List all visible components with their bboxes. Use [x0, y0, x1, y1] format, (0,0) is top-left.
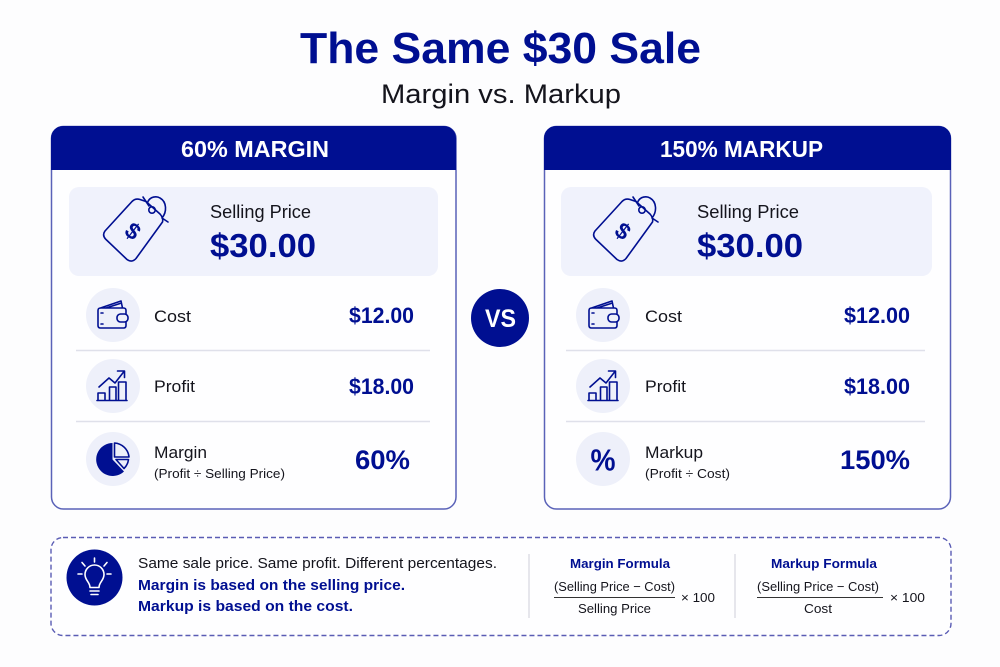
- icon: price tag: [594, 197, 658, 261]
- margin formula note: (Profit ÷ Selling Price): [154, 466, 285, 481]
- margin value: 60%: [355, 445, 410, 475]
- markup formula: × 100: [890, 590, 925, 605]
- row: profit: [86, 359, 414, 413]
- takeaway text: Same sale price. Same profit. Different percentages.: [138, 556, 497, 572]
- margin formula: Selling Price: [578, 601, 651, 616]
- row: profit: [576, 359, 910, 413]
- margin formula: (Selling Price − Cost): [554, 579, 675, 594]
- takeaway text: Markup is based on the cost.: [138, 599, 353, 615]
- icon: price tag: $: [120, 217, 146, 245]
- markup formula: (Selling Price − Cost): [757, 579, 879, 594]
- margin formula: [554, 556, 715, 616]
- card header: [544, 126, 951, 170]
- margin formula: Margin Formula: [570, 556, 671, 571]
- profit label: Profit: [154, 377, 195, 396]
- selling price label: Selling Price: [697, 202, 799, 222]
- selling price label: Selling Price: [210, 202, 311, 222]
- formula dividers: [529, 554, 735, 618]
- icon: wallet: [589, 301, 619, 328]
- icon: growth chart: [588, 371, 618, 400]
- card header: [51, 126, 456, 170]
- icon: percent sign: %: [590, 442, 616, 478]
- icon: light bulb: [66, 550, 122, 606]
- profit value: $18.00: [349, 374, 414, 399]
- divider lines: [76, 350, 430, 422]
- selling price panel: [561, 187, 932, 276]
- divider lines: [566, 350, 925, 422]
- profit value: $18.00: [844, 374, 910, 399]
- icon: pie chart: [96, 443, 129, 476]
- icon: wallet: [98, 301, 128, 328]
- markup label: Markup: [645, 443, 703, 462]
- row: cost: [576, 288, 910, 342]
- markup formula: Markup Formula: [771, 556, 878, 571]
- icon: price tag: $: [610, 217, 636, 245]
- vs badge: [471, 289, 529, 347]
- subtitle: Margin vs. Markup: [381, 79, 621, 109]
- cost value: $12.00: [349, 303, 414, 328]
- takeaway text: Margin is based on the selling price.: [138, 578, 405, 594]
- cost label: Cost: [154, 307, 191, 326]
- panel: key takeaway and formulas: [51, 538, 951, 636]
- dashed outline: [51, 538, 951, 636]
- selling price value: $30.00: [210, 227, 316, 264]
- card header: 60% MARGIN: [181, 136, 329, 162]
- profit label: Profit: [645, 377, 686, 396]
- selling price panel: [69, 187, 438, 276]
- vs badge: VS: [485, 305, 516, 333]
- row: cost: [86, 288, 414, 342]
- row: markup: [576, 432, 910, 486]
- card outline: [52, 126, 456, 509]
- margin label: Margin: [154, 443, 207, 462]
- panel: 150% markup: [544, 126, 951, 509]
- takeaway text: [138, 556, 497, 615]
- card outline: [544, 126, 950, 509]
- icon: growth chart: [97, 371, 127, 400]
- row: margin: [86, 432, 410, 486]
- markup formula note: (Profit ÷ Cost): [645, 466, 730, 481]
- margin formula: × 100: [681, 590, 715, 605]
- title: The Same $30 Sale: [300, 24, 701, 73]
- cost label: Cost: [645, 307, 682, 326]
- markup value: 150%: [840, 445, 910, 475]
- panel: 60% margin: [51, 126, 456, 509]
- card header: 150% MARKUP: [660, 136, 823, 162]
- cost value: $12.00: [844, 303, 910, 328]
- icon: price tag: [104, 197, 168, 261]
- markup formula: Cost: [804, 601, 832, 616]
- markup formula: [757, 556, 925, 616]
- selling price value: $30.00: [697, 227, 803, 264]
